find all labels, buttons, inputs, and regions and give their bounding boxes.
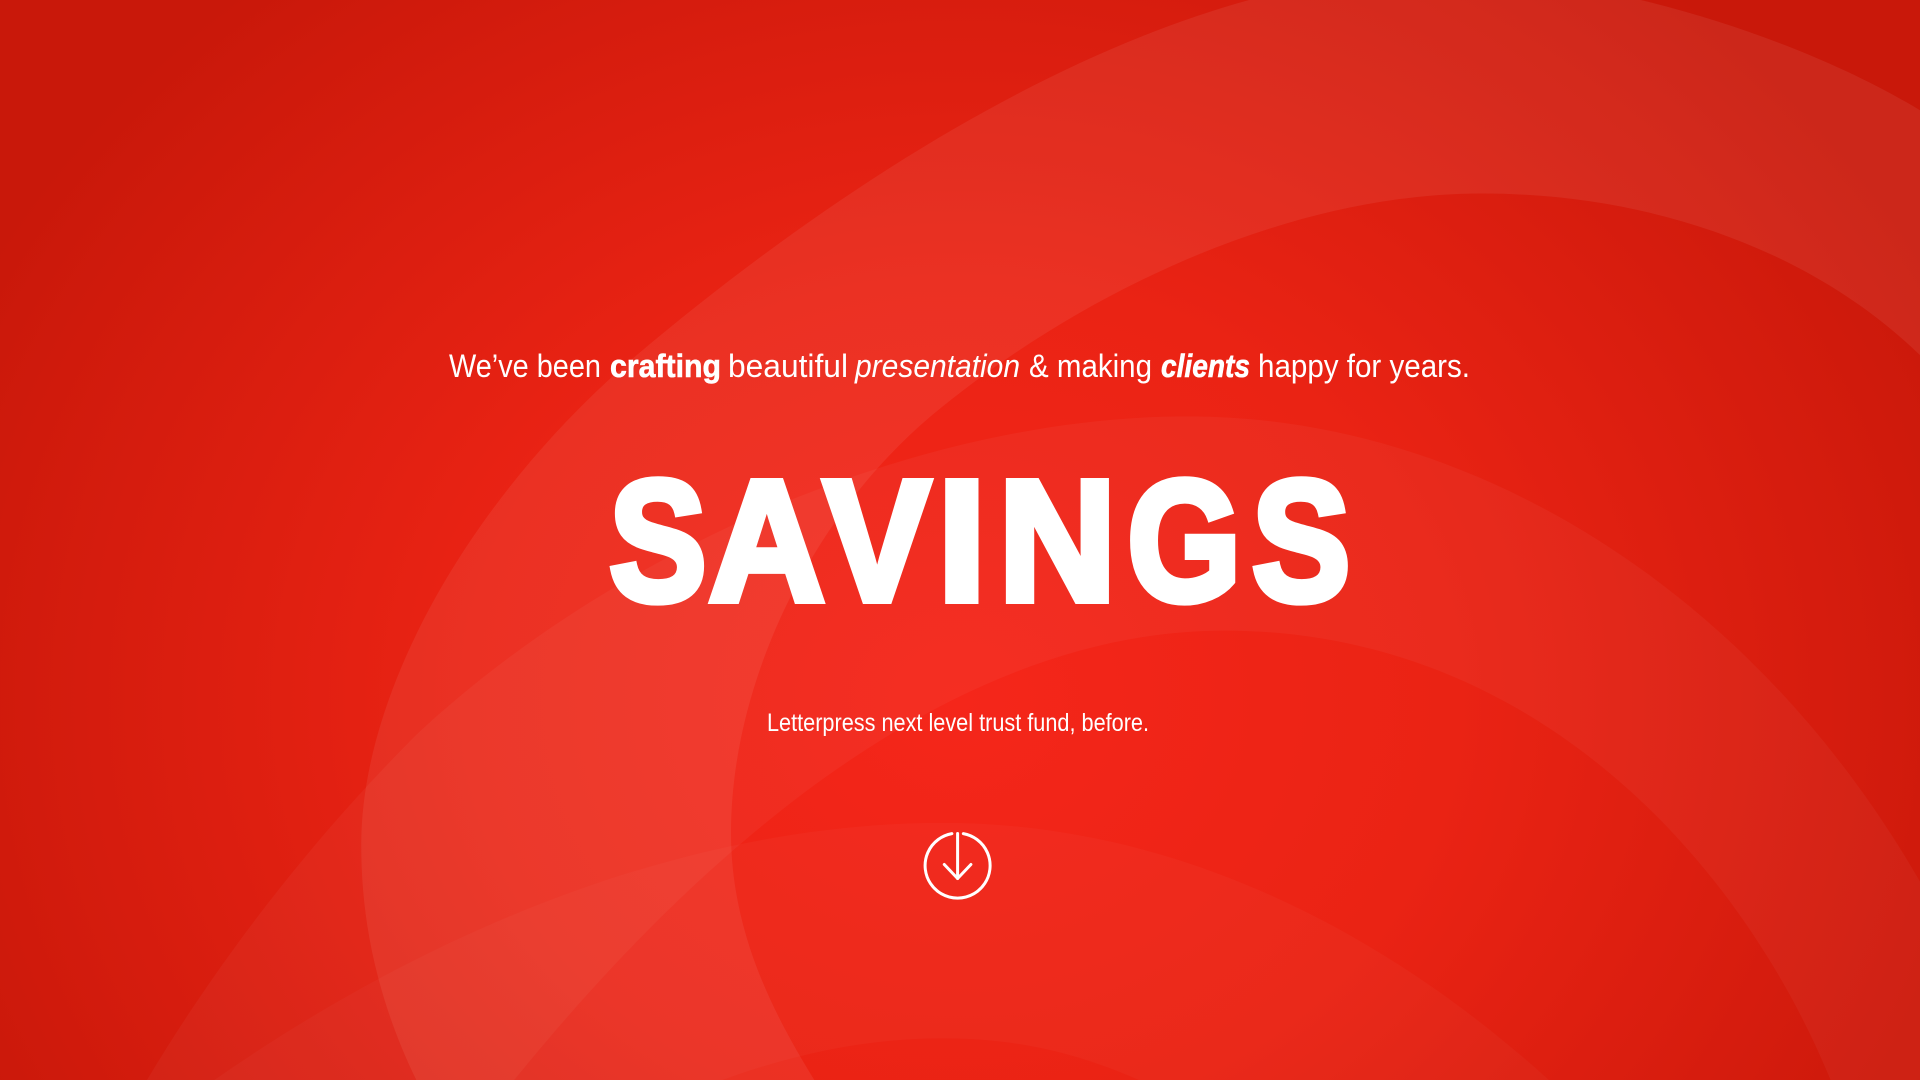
title: I	[938, 446, 986, 637]
intro sentence: & making	[1029, 348, 1152, 384]
title: V	[824, 446, 930, 637]
title	[609, 446, 1350, 637]
title: S	[609, 446, 706, 637]
intro sentence: beautiful	[728, 348, 848, 384]
title: S	[1252, 446, 1350, 637]
intro sentence: We’ve been	[449, 348, 601, 384]
ring: lower band	[214, 823, 1549, 1080]
intro sentence	[449, 348, 1470, 384]
title: A	[709, 446, 825, 637]
subtitle: Letterpress next level trust fund, before.	[767, 709, 1149, 737]
icon: download arrow in circle	[925, 834, 990, 898]
title: G	[1128, 446, 1241, 637]
intro sentence: happy for years.	[1258, 348, 1470, 384]
intro sentence: presentation	[854, 348, 1020, 384]
ring: middle band	[147, 416, 1920, 1080]
intro sentence: crafting	[610, 348, 721, 384]
intro sentence: clients	[1161, 348, 1250, 384]
title: N	[999, 446, 1116, 637]
